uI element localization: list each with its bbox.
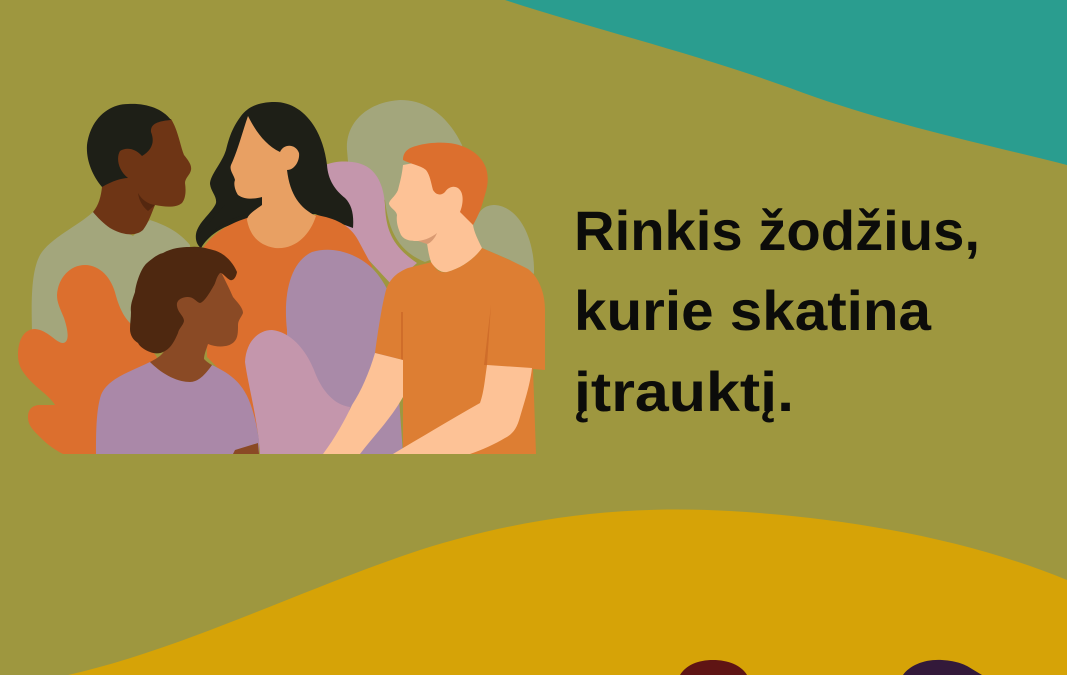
gold wave bottom [68,509,1067,675]
man 1 head and neck [87,104,191,234]
man 1 jaw shadow [138,193,155,211]
heading [574,199,980,423]
child shirt [96,362,259,454]
pink foliage front [245,330,350,454]
dark purple shape cropped at bottom [903,660,982,675]
man 1 hair [87,104,171,187]
child face and neck [150,270,243,382]
man 2 right arm [393,365,532,454]
teal wave top right [505,0,1067,165]
maroon shape cropped at bottom [680,660,747,675]
woman face and neck [231,116,316,248]
child hair [130,247,237,353]
child forearm [233,443,259,454]
heading: kurie skatina [574,279,932,342]
man 1 skin [93,119,191,234]
leaf orange foliage [18,265,157,454]
man 2 orange shirt [375,248,545,454]
man 2 sleeve fold [401,305,491,365]
woman back hair [196,102,353,248]
woman orange shirt [203,215,380,440]
woman hair front lock [198,205,262,248]
man 2 ear [445,187,462,215]
heading: įtrauktį. [574,360,794,423]
man 2 face and neck [389,160,482,272]
back sage foliage [347,100,534,274]
purple foliage [286,250,403,454]
heading: Rinkis žodžius, [574,199,980,262]
man 1 sage shirt [32,212,190,350]
man 2 head [389,143,488,272]
man 2 jaw shadow [418,233,437,244]
illustration: group of people [18,100,545,454]
back pink foliage [325,161,417,285]
man 2 left arm [323,353,403,454]
man 2 hair [403,143,488,225]
child [96,247,259,454]
